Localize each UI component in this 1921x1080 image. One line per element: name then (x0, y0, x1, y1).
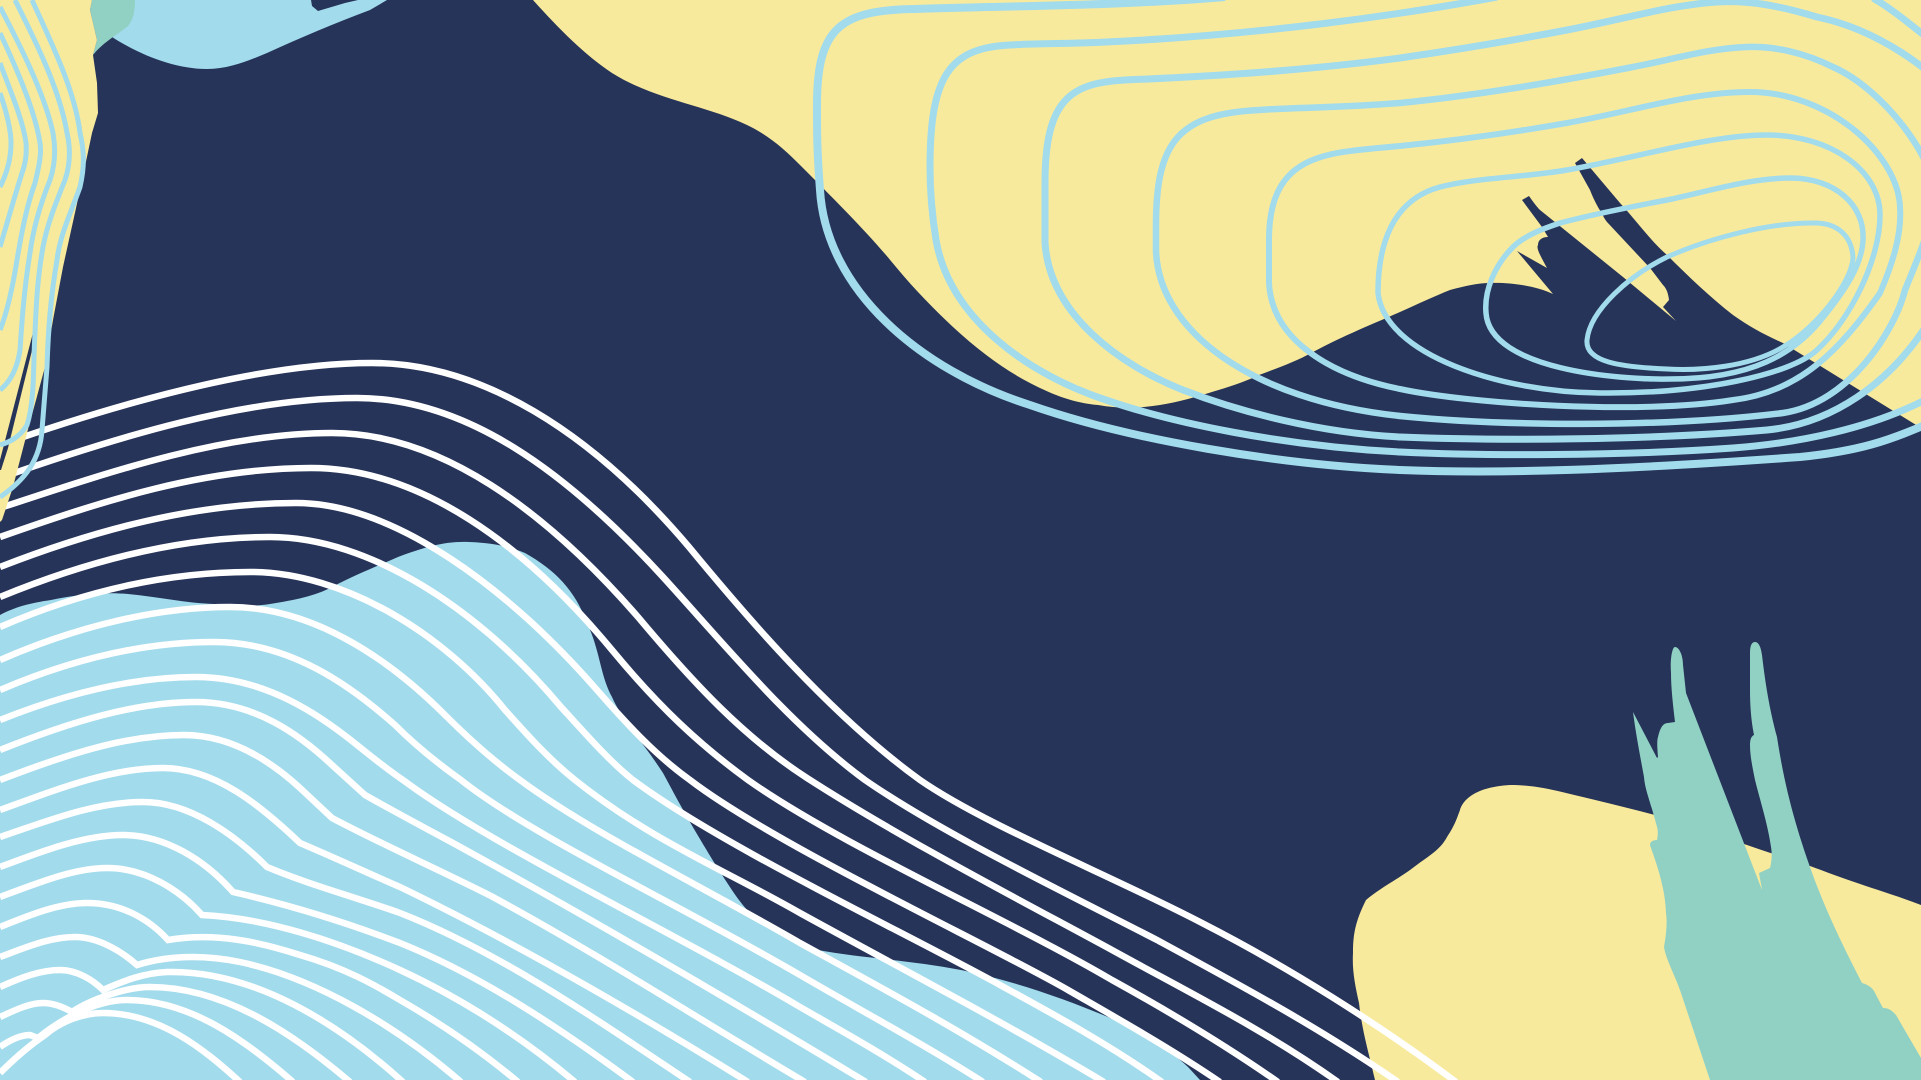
yellow brush strip top left (0, 0, 98, 522)
navy brush mark on top blue blob (311, 0, 358, 11)
light blue blob bottom left (0, 542, 1200, 1080)
light blue blob top left (112, 0, 387, 69)
teal blob top left (90, 0, 135, 55)
white contour lines (0, 363, 1456, 1080)
blue contour loops top right (817, 0, 1921, 471)
blue contour lines on yellow strip (0, 0, 83, 497)
yellow blob top right (533, 0, 1921, 428)
navy sliver in yellow strip (0, 325, 37, 470)
teal brush stroke bottom right (1633, 642, 1921, 1080)
yellow blob bottom right (1353, 785, 1921, 1080)
